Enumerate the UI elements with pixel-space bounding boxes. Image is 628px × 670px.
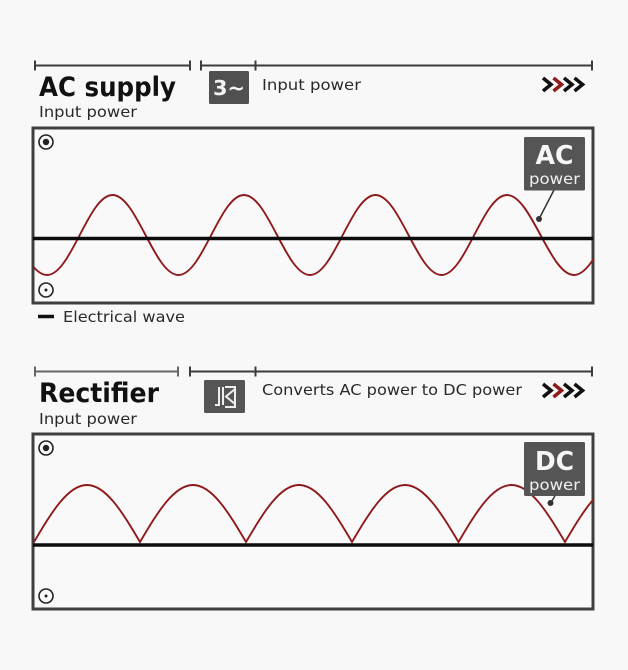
icon: chevrons — [543, 384, 582, 397]
description: converts AC to DC: Converts AC power to DC power — [262, 381, 523, 399]
callout: DC power — [524, 442, 585, 506]
AC sine wave — [0, 195, 628, 275]
section: Rectifier — [33, 366, 618, 609]
icon: three-phase — [209, 71, 249, 104]
callout: AC power: AC — [536, 141, 574, 171]
header brackets — [35, 60, 592, 70]
marker: bottom terminal — [39, 283, 53, 297]
header brackets — [35, 366, 592, 376]
callout: DC power: power — [529, 476, 581, 494]
callout: AC power: power — [529, 170, 581, 188]
callout: AC power — [524, 137, 585, 222]
baseline — [33, 237, 593, 240]
subheading: input power: Input power — [39, 410, 138, 428]
rectified DC wave — [34, 485, 618, 542]
baseline — [33, 543, 593, 547]
callout: DC power: DC — [535, 447, 574, 477]
infographic — [32, 60, 594, 610]
icon: rectifier — [204, 380, 245, 413]
marker: top terminal — [39, 135, 53, 149]
panel: DC chart — [33, 434, 618, 609]
heading: Rectifier: Rectifier — [39, 378, 160, 409]
icon: three-phase: 3~ — [213, 76, 245, 100]
section: AC supply — [32, 60, 594, 322]
icon: chevrons — [543, 78, 582, 91]
panel: AC chart — [0, 128, 628, 303]
heading: AC supply: AC supply — [39, 72, 176, 103]
marker: bottom terminal — [39, 589, 53, 603]
legend: electrical wave: Electrical wave — [63, 308, 185, 326]
description: input power: Input power — [262, 76, 362, 94]
marker: top terminal — [39, 441, 53, 455]
subheading: input power: Input power — [39, 103, 138, 121]
